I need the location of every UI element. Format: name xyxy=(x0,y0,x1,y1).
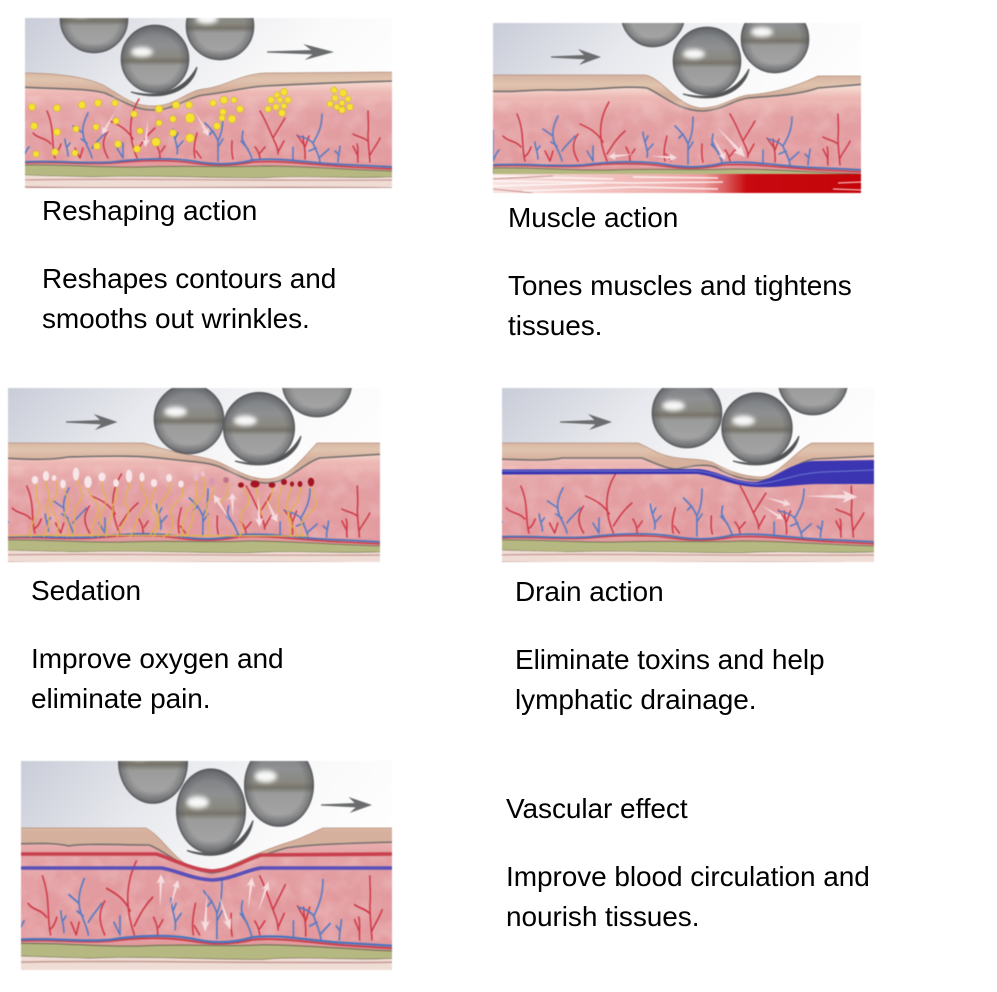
illustration: roller over fat cells xyxy=(24,17,393,189)
text: reshaping description: Reshapes contours and xyxy=(42,263,336,294)
text: sedation description: eliminate pain. xyxy=(31,683,211,714)
text: drain description: Eliminate toxins and help xyxy=(515,644,825,675)
text: muscle description: tissues. xyxy=(508,310,602,341)
illustration: roller over muscle xyxy=(492,22,862,194)
text: vascular description: Improve blood circulation and xyxy=(506,861,870,892)
panel: vascular effect text xyxy=(506,793,870,932)
panel: sedation xyxy=(7,387,381,714)
heading: muscle action: Muscle action xyxy=(508,202,678,233)
text: sedation description: Improve oxygen and xyxy=(31,643,283,674)
illustration: roller over nerve endings xyxy=(7,387,381,563)
text: drain description xyxy=(515,644,825,715)
text: sedation description xyxy=(31,643,283,714)
illustration: roller over lymph vessel xyxy=(501,387,875,563)
text: vascular description: nourish tissues. xyxy=(506,901,699,932)
text: vascular description xyxy=(506,861,870,932)
panel: vascular illustration xyxy=(20,760,393,970)
heading: sedation: Sedation xyxy=(31,575,141,606)
heading: reshaping action: Reshaping action xyxy=(42,195,257,226)
muscle fibres xyxy=(493,174,861,193)
panel: drain action xyxy=(501,387,875,715)
text: muscle description xyxy=(508,270,852,341)
heading: vascular effect: Vascular effect xyxy=(506,793,688,824)
panel: muscle action xyxy=(492,22,862,341)
text: reshaping description: smooths out wrinkles. xyxy=(42,303,310,334)
nerve endings xyxy=(32,468,314,488)
text: reshaping description xyxy=(42,263,336,334)
blood vessels xyxy=(21,854,392,880)
text: muscle description: Tones muscles and tightens xyxy=(508,270,852,301)
panel: reshaping action xyxy=(24,17,393,334)
nerve fibres xyxy=(8,474,316,537)
heading: drain action: Drain action xyxy=(515,576,664,607)
text: drain description: lymphatic drainage. xyxy=(515,684,756,715)
illustration: roller over blood vessels xyxy=(20,760,393,970)
lymph vessel xyxy=(502,460,874,487)
